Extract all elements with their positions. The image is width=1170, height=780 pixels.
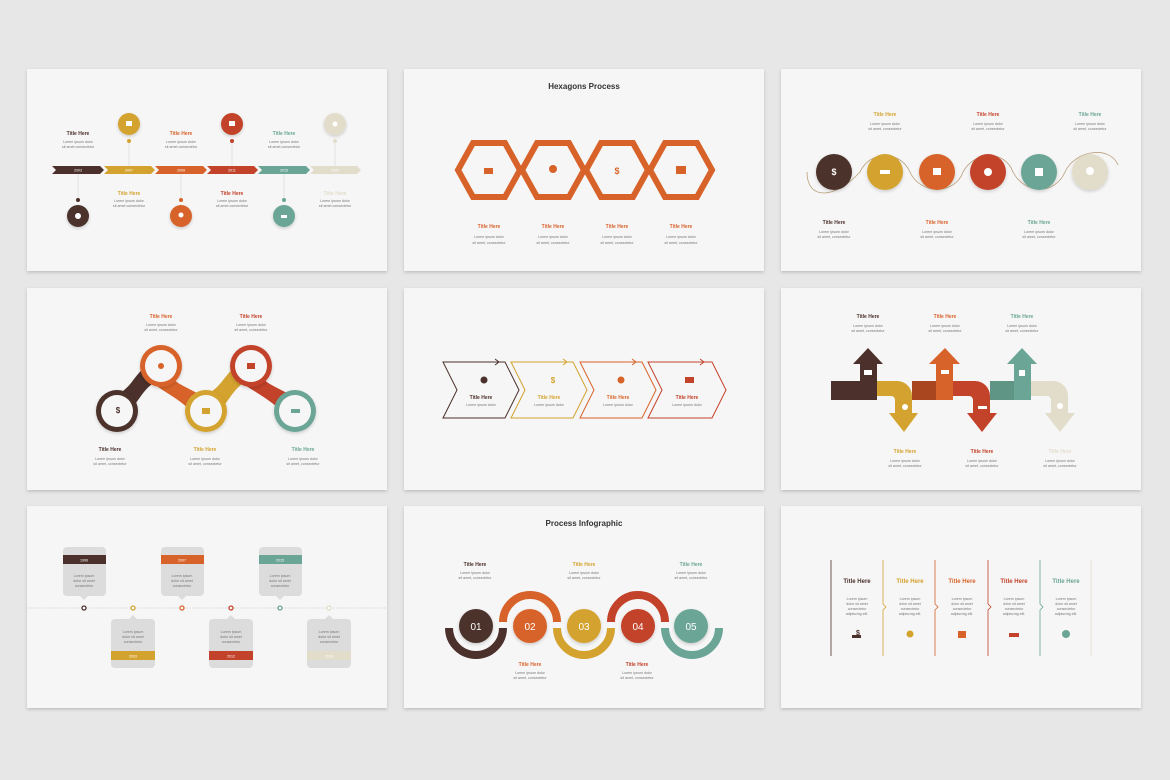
heading: Hexagons Process	[548, 82, 620, 91]
labels: Lorem ipsum dolor	[190, 457, 221, 461]
column content: dolor sit amet	[1055, 602, 1077, 606]
labels: sit amet, consectetur	[1073, 127, 1107, 131]
hexagon labels: Lorem ipsum dolor	[602, 235, 633, 239]
panel: up/down arrows	[781, 288, 1141, 490]
labels: Lorem ipsum dolor	[870, 122, 901, 126]
labels: Lorem ipsum dolor	[288, 457, 319, 461]
labels: sit amet, consectetur	[1005, 329, 1039, 333]
labels: sit amet, consectetur	[567, 576, 601, 580]
column content: consectetur	[901, 607, 920, 611]
timeline text: Title Here	[273, 131, 296, 137]
timeline text: sit amet consectetur	[165, 145, 198, 149]
timeline text: Title Here	[324, 191, 347, 197]
column content: Lorem ipsum	[900, 597, 920, 601]
top cards: consectetur	[75, 584, 94, 588]
timeline text: Lorem ipsum dolor	[320, 199, 351, 203]
column content: Title Here	[1052, 579, 1080, 585]
column content: consectetur	[1005, 607, 1024, 611]
panel: timeline slide	[27, 69, 387, 271]
hexagons	[458, 143, 712, 197]
top cards	[63, 547, 302, 600]
labels: Title Here	[292, 447, 315, 453]
top cards: 1996	[80, 558, 88, 562]
top cards: dolor sit amet	[269, 579, 291, 583]
bottom cards: consectetur	[320, 640, 339, 644]
chevron contents: Title Here	[676, 395, 699, 401]
rings	[96, 345, 316, 432]
labels: Lorem ipsum dolor	[1007, 324, 1038, 328]
bottom cards: 2019	[325, 654, 333, 658]
top cards: dolor sit amet	[73, 579, 95, 583]
bottom cards: Lorem ipsum	[319, 630, 339, 634]
timeline arrows	[52, 166, 361, 174]
labels: sit amet, consectetur	[188, 462, 222, 466]
labels: Title Here	[150, 314, 173, 320]
timeline text: sit amet consectetur	[216, 204, 249, 208]
hexagon labels: Lorem ipsum dolor	[474, 235, 505, 239]
labels: sit amet, consectetur	[851, 329, 885, 333]
chevron contents: Lorem ipsum dolor	[603, 403, 634, 407]
top cards: Lorem ipsum	[270, 574, 290, 578]
column content: Title Here	[896, 579, 924, 585]
labels: Title Here	[240, 314, 263, 320]
labels: sit amet, consectetur	[458, 576, 492, 580]
timeline text: Title Here	[67, 131, 90, 137]
chevron contents: Lorem ipsum dolor	[534, 403, 565, 407]
chevron contents: Title Here	[538, 395, 561, 401]
labels: Lorem ipsum dolor	[819, 230, 850, 234]
labels: Lorem ipsum dolor	[95, 457, 126, 461]
chevrons	[443, 359, 726, 418]
timeline text: sit amet consectetur	[319, 204, 352, 208]
timeline arrows: 2003	[74, 168, 82, 172]
timeline circles	[67, 113, 346, 227]
labels: sit amet, consectetur	[965, 464, 999, 468]
hexagon labels: Title Here	[542, 224, 565, 230]
hexagon labels: Title Here	[478, 224, 501, 230]
hexagon labels: Title Here	[670, 224, 693, 230]
labels: Lorem ipsum dolor	[236, 323, 267, 327]
labels: Title Here	[519, 662, 542, 668]
top cards: Lorem ipsum	[74, 574, 94, 578]
chevron contents: Lorem ipsum dolor	[672, 403, 703, 407]
column content: Lorem ipsum	[1056, 597, 1076, 601]
bottom cards: dolor sit amet	[122, 635, 144, 639]
labels: Title Here	[823, 220, 846, 226]
labels: Lorem ipsum dolor	[967, 459, 998, 463]
top cards: Lorem ipsum	[172, 574, 192, 578]
labels: Lorem ipsum dolor	[973, 122, 1004, 126]
timeline text: Lorem ipsum dolor	[269, 140, 300, 144]
column content: adipiscing elit.	[899, 612, 921, 616]
labels: sit amet, consectetur	[928, 329, 962, 333]
column content: $	[856, 630, 860, 637]
labels: Title Here	[1011, 314, 1034, 320]
column content: Lorem ipsum	[847, 597, 867, 601]
hexagons: $	[614, 166, 620, 176]
hexagon labels: sit amet, consectetur	[472, 241, 506, 245]
column content: Lorem ipsum	[952, 597, 972, 601]
labels: Lorem ipsum dolor	[1024, 230, 1055, 234]
numbered circles	[459, 609, 708, 643]
panel: wave circles	[781, 69, 1141, 271]
column content: dolor sit amet	[899, 602, 921, 606]
panel: process infographic	[404, 506, 764, 708]
column content: dolor sit amet	[846, 602, 868, 606]
labels: sit amet, consectetur	[1043, 464, 1077, 468]
labels: Lorem ipsum dolor	[1045, 459, 1076, 463]
timeline arrows: 2007	[125, 168, 133, 172]
timeline text: Lorem ipsum dolor	[63, 140, 94, 144]
panel: chevron process	[404, 288, 764, 490]
timeline text: sit amet consectetur	[113, 204, 146, 208]
bottom cards: dolor sit amet	[318, 635, 340, 639]
hexagon labels: Lorem ipsum dolor	[666, 235, 697, 239]
labels: Title Here	[874, 112, 897, 118]
panel: process infographic: 05	[685, 622, 697, 633]
labels: Title Here	[857, 314, 880, 320]
labels: Title Here	[1079, 112, 1102, 118]
chevron contents	[466, 376, 703, 407]
column content: consectetur	[848, 607, 867, 611]
column content: consectetur	[1057, 607, 1076, 611]
arrows	[831, 348, 1075, 432]
circles	[816, 154, 1108, 190]
timeline arrows: 2011	[228, 168, 236, 172]
labels: Lorem ipsum dolor	[460, 571, 491, 575]
panel: wave circles: $	[831, 167, 837, 177]
timeline text: sit amet consectetur	[62, 145, 95, 149]
dots	[82, 606, 331, 610]
bottom cards: consectetur	[222, 640, 241, 644]
labels: Lorem ipsum dolor	[515, 671, 546, 675]
top cards: consectetur	[173, 584, 192, 588]
hexagon labels: sit amet, consectetur	[664, 241, 698, 245]
panel: year cards timeline	[27, 506, 387, 708]
bottom cards: dolor sit amet	[220, 635, 242, 639]
labels	[93, 314, 320, 466]
bottom cards: Lorem ipsum	[123, 630, 143, 634]
hexagon labels: sit amet, consectetur	[536, 241, 570, 245]
labels: Lorem ipsum dolor	[853, 324, 884, 328]
hexagon labels: Lorem ipsum dolor	[538, 235, 569, 239]
labels: Title Here	[977, 112, 1000, 118]
hexagon labels	[472, 224, 698, 245]
timeline text	[62, 131, 352, 208]
labels: Lorem ipsum dolor	[146, 323, 177, 327]
bottom cards: 2003	[129, 654, 137, 658]
timeline text: Lorem ipsum dolor	[114, 199, 145, 203]
labels: Title Here	[894, 449, 917, 455]
labels	[817, 112, 1107, 239]
labels: Lorem ipsum dolor	[1075, 122, 1106, 126]
top cards: 2007	[178, 558, 186, 562]
labels: Lorem ipsum dolor	[922, 230, 953, 234]
labels: sit amet, consectetur	[234, 328, 268, 332]
panel: linked rings	[27, 288, 387, 490]
labels: sit amet, consectetur	[971, 127, 1005, 131]
labels: sit amet, consectetur	[513, 676, 547, 680]
column dividers	[831, 560, 1091, 656]
labels	[458, 562, 708, 680]
timeline arrows: 2020	[331, 168, 339, 172]
hexagon labels: sit amet, consectetur	[600, 241, 634, 245]
timeline text: sit amet consectetur	[268, 145, 301, 149]
labels: Title Here	[1028, 220, 1051, 226]
timeline text: Title Here	[170, 131, 193, 137]
top cards: 2015	[276, 558, 284, 562]
labels: Title Here	[971, 449, 994, 455]
column content: Title Here	[948, 579, 976, 585]
labels: Title Here	[1049, 449, 1072, 455]
column content: Lorem ipsum	[1004, 597, 1024, 601]
labels: Title Here	[926, 220, 949, 226]
labels: Title Here	[680, 562, 703, 568]
column content: adipiscing elit.	[1055, 612, 1077, 616]
panel: columns	[781, 506, 1141, 708]
labels: Title Here	[464, 562, 487, 568]
labels	[851, 314, 1077, 468]
chevron contents: Lorem ipsum dolor	[466, 403, 497, 407]
column content: dolor sit amet	[951, 602, 973, 606]
labels: sit amet, consectetur	[620, 676, 654, 680]
labels: Title Here	[194, 447, 217, 453]
labels: Title Here	[573, 562, 596, 568]
column content	[843, 579, 1080, 638]
connectors	[117, 364, 290, 410]
column content: Title Here	[1000, 579, 1028, 585]
panel: process infographic: 01	[470, 622, 482, 633]
wave line	[807, 152, 1118, 193]
labels: Title Here	[626, 662, 649, 668]
bottom cards	[111, 615, 351, 668]
heading: Process Infographic	[546, 519, 623, 528]
top cards: dolor sit amet	[171, 579, 193, 583]
labels: sit amet, consectetur	[674, 576, 708, 580]
timeline text: Title Here	[118, 191, 141, 197]
timeline text: Lorem ipsum dolor	[166, 140, 197, 144]
labels: Title Here	[934, 314, 957, 320]
column content: Title Here	[843, 579, 871, 585]
labels: Lorem ipsum dolor	[569, 571, 600, 575]
labels: sit amet, consectetur	[817, 235, 851, 239]
labels: Title Here	[99, 447, 122, 453]
timeline text: Title Here	[221, 191, 244, 197]
panel: hexagons process	[404, 69, 764, 271]
timeline text: Lorem ipsum dolor	[217, 199, 248, 203]
hexagon labels: Title Here	[606, 224, 629, 230]
chevron contents: Title Here	[607, 395, 630, 401]
timeline arrows: 2009	[177, 168, 185, 172]
labels: sit amet, consectetur	[868, 127, 902, 131]
labels: sit amet, consectetur	[93, 462, 127, 466]
bottom cards: consectetur	[124, 640, 143, 644]
panel: process infographic: 03	[578, 622, 590, 633]
top cards: consectetur	[271, 584, 290, 588]
column content: consectetur	[953, 607, 972, 611]
column content: adipiscing elit.	[846, 612, 868, 616]
panel: process infographic: 02	[524, 622, 536, 633]
column content: adipiscing elit.	[1003, 612, 1025, 616]
labels: Lorem ipsum dolor	[676, 571, 707, 575]
labels: sit amet, consectetur	[286, 462, 320, 466]
timeline arrows: 2015	[280, 168, 288, 172]
bottom cards: 2012	[227, 654, 235, 658]
panel: process infographic: 04	[632, 622, 644, 633]
chevron contents: $	[551, 376, 556, 385]
labels: sit amet, consectetur	[144, 328, 178, 332]
arcs	[449, 595, 719, 655]
labels: Lorem ipsum dolor	[622, 671, 653, 675]
chevron contents: Title Here	[470, 395, 493, 401]
bottom cards: Lorem ipsum	[221, 630, 241, 634]
labels: Lorem ipsum dolor	[890, 459, 921, 463]
labels: Lorem ipsum dolor	[930, 324, 961, 328]
column content: dolor sit amet	[1003, 602, 1025, 606]
labels: sit amet, consectetur	[920, 235, 954, 239]
labels: sit amet, consectetur	[1022, 235, 1056, 239]
labels: sit amet, consectetur	[888, 464, 922, 468]
panel: linked rings: $	[116, 406, 121, 415]
column content: adipiscing elit.	[951, 612, 973, 616]
